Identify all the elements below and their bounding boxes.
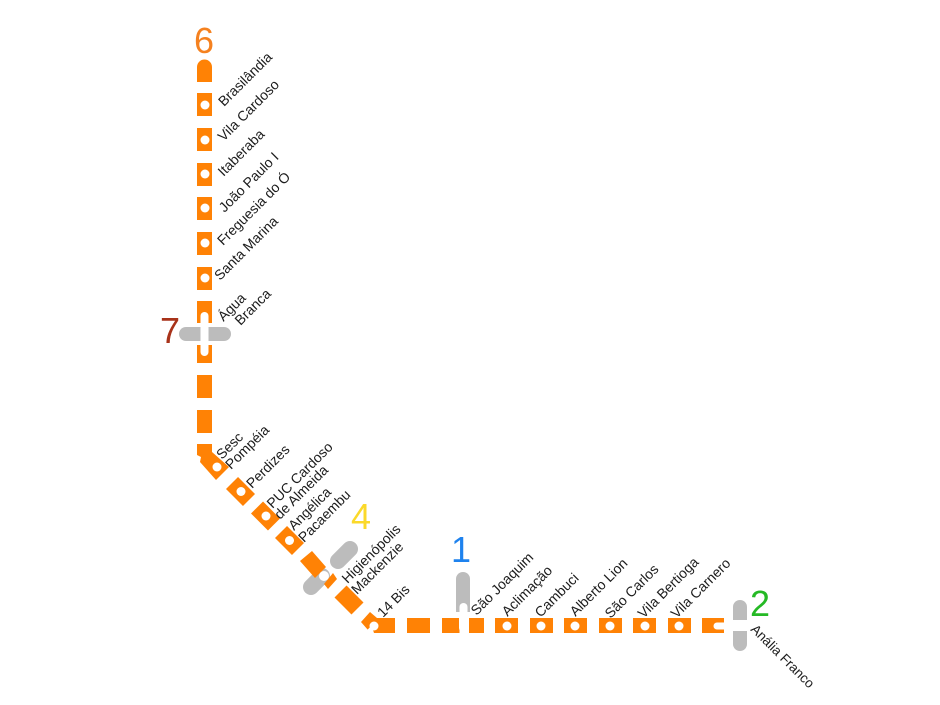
label: Angélica Pacaembu: Pacaembu: [295, 486, 353, 545]
label: Alberto Lion: Alberto Lion: [566, 555, 630, 619]
label: Vila Cardoso: Vila Cardoso: [214, 76, 282, 144]
interchange: line 1 grey bar: [456, 572, 470, 612]
label: Água Branca: Branca: [231, 285, 274, 328]
label: Vila Carnero: Vila Carnero: [667, 555, 734, 621]
line number 1: 1: [451, 529, 471, 570]
line number 6: 6: [194, 20, 214, 61]
label: Itaberaba: Itaberaba: [214, 126, 268, 179]
label: Angélica Pacaembu: Angélica: [285, 484, 334, 533]
station markers: [200, 100, 684, 630]
interchange: line 4 grey bar: [311, 549, 350, 587]
label: João Paulo I: João Paulo I: [215, 149, 282, 215]
label: PUC Cardoso de Almeida: PUC Cardoso: [263, 439, 336, 511]
label: Brasilândia: Brasilândia: [215, 49, 275, 109]
label: Água Branca: Água: [214, 290, 249, 324]
orange diagonal track: [197, 444, 395, 633]
label: Anália Franco: Anália Franco: [748, 622, 817, 691]
label: São Carlos: São Carlos: [601, 561, 662, 621]
line number 2: 2: [750, 583, 770, 624]
label: 14 Bis: 14 Bis: [374, 581, 413, 620]
label: Vila Bertioga: Vila Bertioga: [634, 554, 702, 621]
orange vertical track: [197, 60, 212, 433]
label: Cambuci: Cambuci: [531, 570, 582, 620]
interchange: line 7 grey bar: [179, 327, 231, 341]
interchange: line 2 grey bar: [733, 600, 747, 651]
label: Sesc Pompéia: Sesc: [213, 429, 246, 462]
label: Perdizes: Perdizes: [243, 441, 293, 491]
label: São Joaquim: São Joaquim: [467, 549, 536, 618]
label: Higienópolis Mackenzie: Higienópolis: [338, 521, 404, 586]
white cut-outs at interchanges: [204, 316, 728, 640]
line number 4: 4: [351, 496, 371, 537]
label: PUC Cardoso de Almeida: de Almeida: [271, 462, 331, 522]
label: Freguesia do Ó: Freguesia do Ó: [214, 168, 293, 248]
label: Sesc Pompéia: Pompéia: [222, 422, 272, 472]
label: Aclimação: Aclimação: [498, 562, 555, 619]
label: Higienópolis Mackenzie: Mackenzie: [348, 538, 407, 597]
orange horizontal track: [407, 618, 724, 633]
label: Santa Marina: Santa Marina: [211, 213, 281, 283]
line number 7: 7: [160, 310, 180, 351]
